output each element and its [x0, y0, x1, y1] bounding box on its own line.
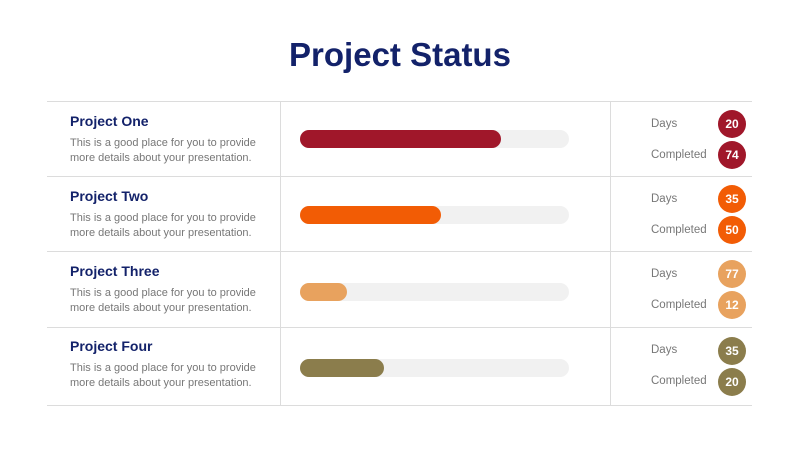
row: project three — [70, 260, 746, 319]
heading: Project One — [70, 113, 149, 129]
row: project one — [70, 110, 746, 169]
badge completed: 74 — [725, 148, 739, 162]
badge days: 20 — [725, 117, 739, 131]
heading: Project Two — [70, 188, 148, 204]
badge days: 77 — [725, 267, 739, 281]
badge days — [718, 260, 746, 288]
badge completed — [718, 141, 746, 169]
label days: Days — [651, 344, 677, 356]
description: This is a good place for you to provide more details about your presentation. — [70, 212, 256, 239]
badge days — [718, 185, 746, 213]
badge completed: 20 — [725, 375, 739, 389]
heading: Project Four — [70, 338, 152, 354]
progress bar — [300, 283, 569, 301]
badge completed: 50 — [725, 223, 739, 237]
label completed: Completed — [651, 299, 707, 311]
label days: Days — [651, 118, 677, 130]
progress bar — [300, 206, 569, 224]
row: project four — [70, 337, 746, 396]
label days: Days — [651, 193, 677, 205]
badge days — [718, 110, 746, 138]
badge days: 35 — [725, 344, 739, 358]
row: project two — [70, 185, 746, 244]
progress bar — [300, 130, 569, 148]
description: This is a good place for you to provide more details about your presentation. — [70, 362, 256, 389]
label completed: Completed — [651, 375, 707, 387]
badge completed: 12 — [725, 298, 739, 312]
label completed: Completed — [651, 224, 707, 236]
badge completed — [718, 216, 746, 244]
badge completed — [718, 291, 746, 319]
badge days: 35 — [725, 192, 739, 206]
label days: Days — [651, 268, 677, 280]
badge completed — [718, 368, 746, 396]
heading: Project Three — [70, 263, 159, 279]
badge days — [718, 337, 746, 365]
description: This is a good place for you to provide more details about your presentation. — [70, 287, 256, 314]
progress bar — [300, 359, 569, 377]
description: This is a good place for you to provide more details about your presentation. — [70, 137, 256, 164]
title: Project Status — [289, 36, 511, 73]
label completed: Completed — [651, 149, 707, 161]
